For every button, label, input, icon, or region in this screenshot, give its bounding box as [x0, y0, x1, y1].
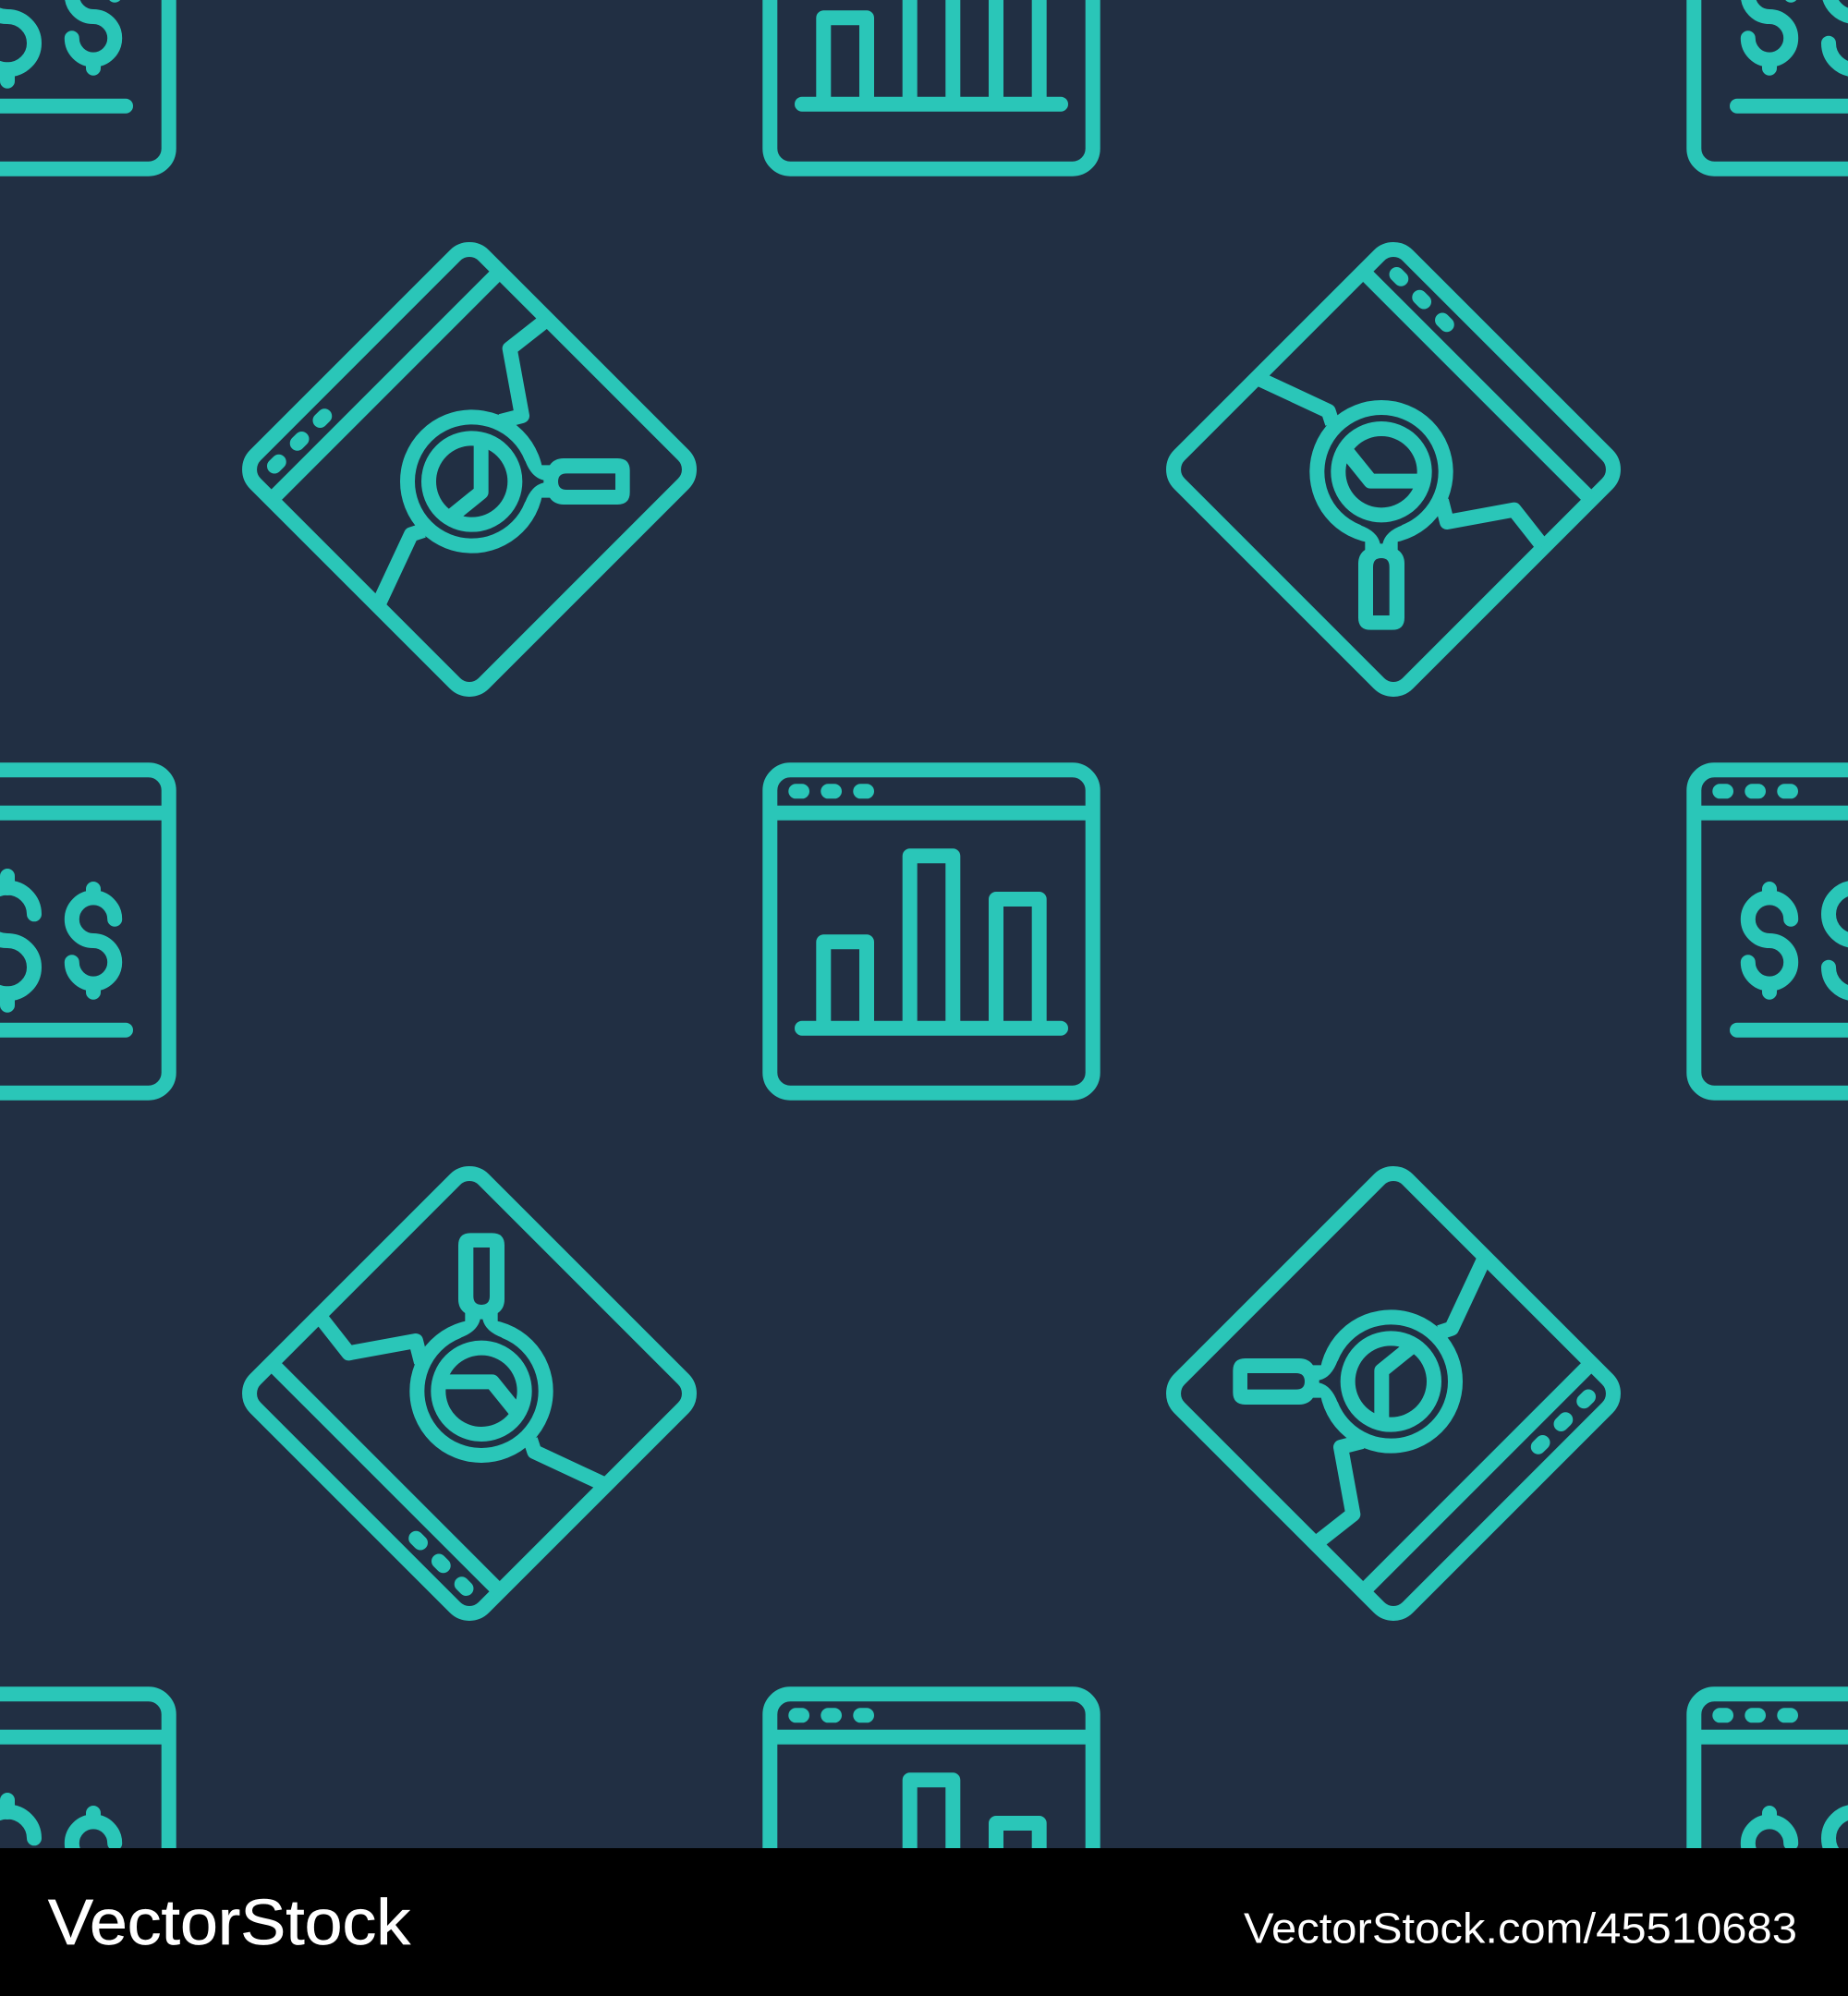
icon: bar chart window center — [770, 770, 1093, 1093]
watermark image id: VectorStock.com/45510683 — [1244, 1904, 1797, 1952]
watermark logo: VectorStock — [48, 1886, 411, 1958]
icon: magnifier pie chart diamond top right — [1165, 241, 1622, 698]
icon: magnifier pie chart diamond bottom left — [241, 1165, 698, 1622]
icon: dollar window top left — [0, 0, 169, 169]
icon: dollar window top right — [1694, 0, 1848, 169]
footer band — [0, 1848, 1848, 1996]
icon: magnifier pie chart diamond top left — [241, 241, 698, 698]
icon: dollar window bottom left — [0, 1694, 169, 1996]
icon: dollar window bottom right — [1694, 1694, 1848, 1996]
icon: bar chart window top center — [770, 0, 1093, 169]
icon: dollar window middle left — [0, 770, 169, 1093]
icon: bar chart window bottom center — [770, 1694, 1093, 1996]
icon: dollar window middle right — [1694, 770, 1848, 1093]
icon: magnifier pie chart diamond bottom right — [1165, 1165, 1622, 1622]
